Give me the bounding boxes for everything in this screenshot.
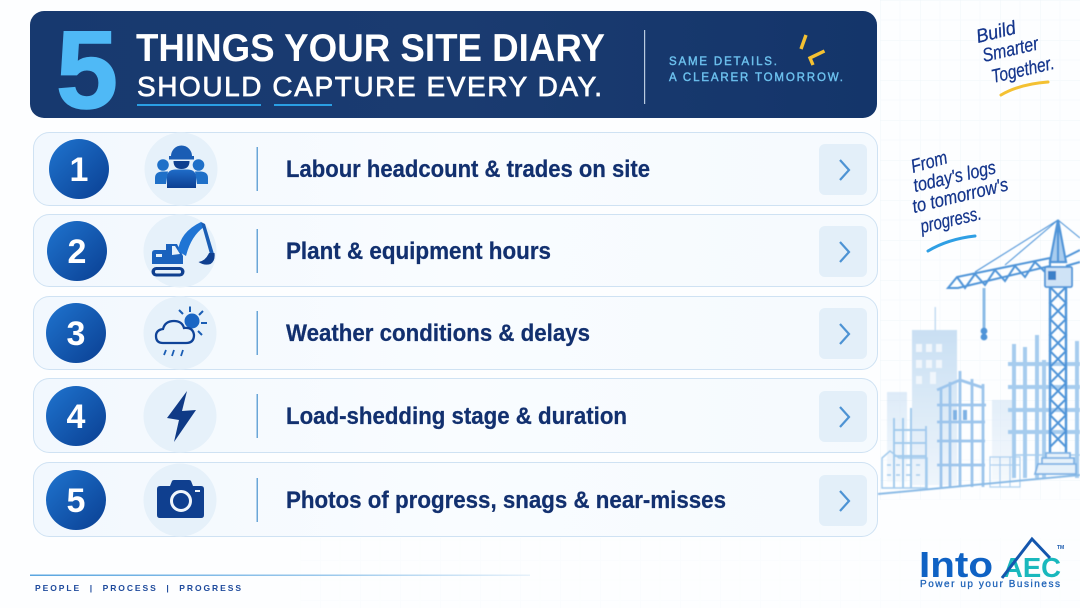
arrow button [819,144,867,195]
left small building [882,408,927,488]
handwritten note: build smarter together: Build [974,17,1019,48]
icon: yellow spark [801,35,824,65]
logo: IntoAEC: Into [919,544,993,585]
item text: Plant & equipment hours [286,238,551,265]
handwritten note: build smarter together [974,17,1056,95]
ground line [878,475,1080,494]
logo trademark: TM [1057,545,1064,551]
crane [948,220,1080,474]
header tagline: SAME DETAILS. [669,56,777,68]
logo roof mark [1002,539,1050,578]
crane base [1035,453,1076,474]
number badge 5: 5 [67,482,85,520]
handwritten note: build smarter together: Smarter [980,33,1041,67]
blue underline [928,236,975,251]
item text: Weather conditions & delays [286,320,590,347]
icon: workers [144,132,218,206]
row divider [256,229,258,273]
number badge 4: 4 [67,398,86,436]
number badge 1 [49,139,109,199]
crane cab [1045,267,1072,287]
footer labels: PEOPLE | PROCESS | PROGRESS [35,583,241,593]
icon: excavator [144,214,216,288]
title underline accents [137,104,332,106]
handwritten note: from today's logs [909,147,1011,251]
logo: IntoAEC [919,539,1064,590]
number badge 5 [46,470,106,530]
item text: Load-shedding stage & duration [286,403,627,430]
number badge 4 [46,386,106,446]
header banner [30,9,877,132]
handwritten note: build smarter together: Together. [989,53,1056,88]
logo: IntoAEC: AEC [1003,552,1061,583]
arrow button [819,308,867,359]
crane stay cables [975,220,1080,272]
handwritten note: from today's logs: today's logs [911,157,998,197]
row divider [256,478,258,522]
handwritten note: from today's logs: progress. [918,203,984,238]
yellow underline [1001,82,1048,95]
row divider [256,147,258,191]
title line 2: SHOULD CAPTURE EVERY DAY. [137,71,602,102]
panel: item 2 plant [34,214,878,288]
icon: weather [144,296,216,370]
header tagline: A CLEARER TOMORROW. [669,72,843,84]
footer rule [30,574,530,576]
big number 5: 5 [56,9,118,132]
number badge 1: 1 [70,151,88,189]
header divider [644,30,645,104]
handwritten note: from today's logs: From [909,147,950,178]
row divider [256,394,258,438]
panel: item 5 photos [34,462,878,536]
logo tagline: Power up your Business [920,579,1060,590]
pale towers [887,307,1014,485]
panel: item 3 weather [34,296,878,370]
handwritten note: from today's logs: to tomorrow's [910,174,1011,218]
number badge 3 [46,303,106,363]
arrow button [819,226,867,277]
crane mast [1050,287,1066,453]
illustration: construction skyline and crane [878,220,1080,494]
right skeleton building [1008,335,1080,478]
item text: Labour headcount & trades on site [286,156,650,183]
crane jib [948,250,1080,288]
middle skeleton building [937,371,1020,487]
row divider [256,311,258,355]
number badge 2 [47,221,107,281]
crane tower top [1050,220,1066,262]
arrow button [819,475,867,526]
number badge 3: 3 [67,315,85,353]
arrow button [819,391,867,442]
panel: item 4 load-shedding [34,378,878,452]
crane hook [982,288,986,330]
title line 1: THINGS YOUR SITE DIARY [136,27,605,70]
item text: Photos of progress, snags & near-misses [286,487,726,514]
panel: item 1 labour [34,132,878,206]
number badge 2: 2 [68,233,86,271]
icon: camera [144,464,216,536]
icon: lightning bolt [144,380,216,452]
